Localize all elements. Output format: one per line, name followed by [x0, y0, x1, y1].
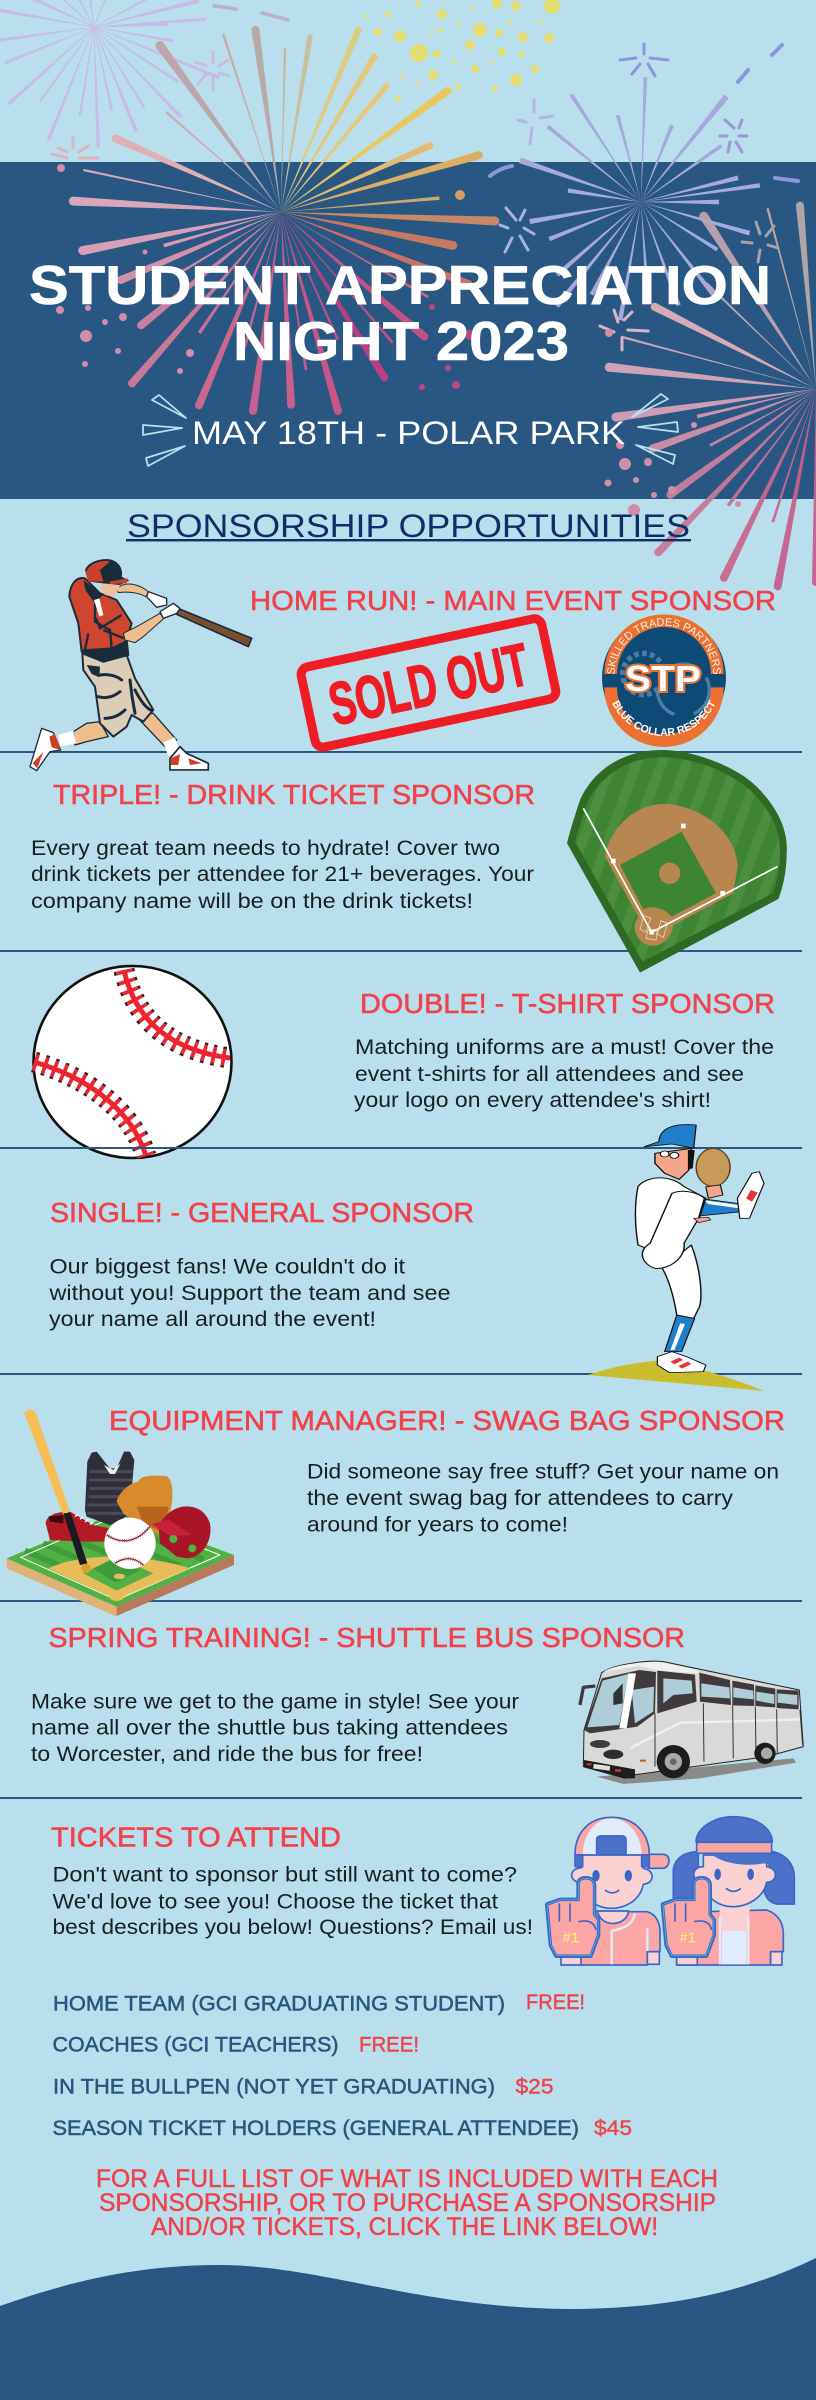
firework: top-left detached dashes	[214, 6, 288, 20]
right leg	[135, 713, 177, 747]
text: tickets description: We'd love to see you! Choose the ticket that	[52, 1890, 498, 1914]
icon: burst left of subtitle	[143, 395, 186, 466]
boy: cap	[648, 1854, 669, 1868]
gloves	[147, 592, 180, 618]
firework: yellow glitter dots	[363, 0, 560, 102]
side windows	[657, 1671, 697, 1713]
firework sparkles	[52, 44, 778, 350]
ticket: in the bullpen: $25	[516, 2076, 554, 2098]
text: equipment description: the event swag bag for attendees to carry	[307, 1486, 733, 1510]
text: single description	[48, 1254, 450, 1331]
icon: burst right of subtitle	[632, 394, 678, 464]
text: single description: your name all around the event!	[49, 1307, 376, 1331]
girl: head	[694, 1855, 775, 1907]
girl: foam finger: #1	[680, 1930, 696, 1946]
illustration: two fans with foam fingers: #1	[563, 1930, 579, 1946]
text: spring training description: Make sure we get to the game in style! See your	[31, 1690, 519, 1714]
front details	[590, 1740, 610, 1748]
header navy band	[0, 162, 816, 499]
firework: big centre burst	[69, 25, 499, 416]
body	[583, 1661, 803, 1778]
text: spring training description	[31, 1690, 519, 1766]
text: triple description	[31, 836, 534, 913]
ticket: season ticket holders: SEASON TICKET HOLDERS (GENERAL ATTENDEE)	[52, 2117, 579, 2140]
glove	[696, 1148, 730, 1186]
illustration: batter swinging	[30, 559, 252, 771]
boy: foam finger	[548, 1879, 597, 1955]
text: tickets description: best describes you below! Questions? Email us!	[52, 1915, 533, 1939]
text: equipment description	[307, 1460, 779, 1536]
torso	[635, 1178, 706, 1250]
girl: foam finger	[664, 1879, 713, 1955]
ball	[104, 1518, 156, 1569]
sold out stamp	[300, 617, 557, 749]
heading: tickets to attend: TICKETS TO ATTEND	[51, 1822, 341, 1852]
call to action text: FOR A FULL LIST OF WHAT IS INCLUDED WITH EACH	[96, 2165, 718, 2193]
illustration: two fans with foam fingers	[548, 1817, 794, 1965]
title: NIGHT 2023	[233, 310, 569, 372]
infield dirt	[605, 804, 738, 946]
foul lines and bases	[583, 808, 777, 932]
arms	[123, 613, 164, 643]
glove	[117, 1476, 172, 1537]
divider rules	[0, 751, 802, 1799]
text: triple description: Every great team needs to hydrate! Cover two	[31, 836, 500, 860]
illustration: pitcher on mound	[588, 1125, 764, 1391]
title: STUDENT APPRECIATION	[29, 254, 771, 316]
title	[29, 254, 771, 372]
text: spring training description: name all over the shuttle bus taking attendees	[31, 1716, 508, 1740]
text: spring training description: to Worcester, and ride the bus for free!	[31, 1742, 423, 1766]
logo: Skilled Trades Partners badge: BLUE COLLAR RESPECT	[612, 700, 715, 736]
call to action text: SPONSORSHIP, OR TO PURCHASE A SPONSORSHIP	[99, 2189, 716, 2217]
ticket: season ticket holders: $45	[594, 2117, 632, 2140]
section heading: sponsorship opportunities: SPONSORSHIP OPPORTUNITIES	[127, 508, 690, 544]
helmet	[158, 1506, 210, 1558]
text: single description: without you! Support the team and see	[48, 1281, 450, 1305]
ticket: coaches: COACHES (GCI TEACHERS)	[52, 2034, 338, 2056]
ticket: in the bullpen: IN THE BULLPEN (NOT YET GRADUATING)	[53, 2076, 495, 2098]
ticket: home team: FREE!	[526, 1991, 585, 2014]
panel lines	[655, 1703, 803, 1767]
mound	[588, 1361, 764, 1391]
standing leg	[665, 1315, 695, 1352]
boy: head	[572, 1855, 652, 1908]
firework: lilac burst right	[519, 77, 760, 321]
gear shapes	[623, 653, 664, 695]
shoe	[46, 1512, 110, 1542]
logo: Skilled Trades Partners badge: SKILLED TRADES PARTNERS	[607, 618, 721, 674]
bat	[24, 1410, 70, 1515]
thigh	[642, 1191, 704, 1268]
firework: top-left lilac burst	[0, 0, 220, 147]
torso	[69, 578, 132, 662]
girl: hair	[673, 1852, 698, 1905]
call to action text	[96, 2165, 718, 2241]
logo: Skilled Trades Partners badge	[602, 614, 726, 747]
wheels	[657, 1745, 690, 1778]
ticket: home team: HOME TEAM (GCI GRADUATING STUDENT)	[53, 1992, 505, 2016]
text: double description: your logo on every attendee's shirt!	[354, 1088, 711, 1112]
text: double description: Matching uniforms are a must! Cover the	[355, 1035, 774, 1059]
raised leg	[699, 1198, 742, 1216]
heading: equipment manager: EQUIPMENT MANAGER! - SWAG BAG SPONSOR	[109, 1405, 785, 1436]
head and helmet	[100, 582, 120, 597]
illustration: baseball equipment on field	[7, 1410, 234, 1617]
heading: triple: TRIPLE! - DRINK TICKET SPONSOR	[53, 779, 535, 810]
footer navy wave	[0, 2258, 816, 2400]
mirror	[580, 1686, 595, 1705]
logo: Skilled Trades Partners badge: STP	[625, 658, 701, 699]
date and venue subtitle: MAY 18TH - POLAR PARK	[192, 415, 625, 451]
firework: pink dots	[56, 164, 741, 516]
boy: body	[573, 1912, 660, 1965]
call to action text: AND/OR TICKETS, CLICK THE LINK BELOW!	[151, 2213, 658, 2241]
text: equipment description: around for years to come!	[307, 1512, 568, 1536]
head and cap	[655, 1148, 691, 1179]
text: single description: Our biggest fans! We couldn't do it	[50, 1254, 405, 1278]
shadow	[597, 1758, 796, 1784]
ticket list	[52, 1991, 632, 2140]
text: tickets description: Don't want to sponsor but still want to come?	[52, 1862, 517, 1886]
text: triple description: company name will be on the drink tickets!	[31, 889, 473, 913]
heading: double: DOUBLE! - T-SHIRT SPONSOR	[360, 988, 775, 1019]
girl: body	[677, 1910, 783, 1965]
ticket: coaches: FREE!	[359, 2034, 419, 2056]
heading: home run: HOME RUN! - MAIN EVENT SPONSOR	[250, 585, 776, 616]
sold out stamp: SOLD OUT	[323, 631, 535, 738]
windshield	[584, 1670, 656, 1733]
chest protector	[85, 1452, 134, 1525]
illustration: baseball	[34, 966, 232, 1158]
firework: lower right pink burst	[593, 191, 816, 604]
text: double description	[354, 1035, 774, 1112]
text: equipment description: Did someone say free stuff? Get your name on	[307, 1460, 779, 1484]
infield	[48, 1557, 190, 1599]
pants	[82, 653, 153, 737]
bat	[176, 608, 252, 647]
text: tickets description	[52, 1862, 533, 1939]
illustration: baseball diamond	[567, 750, 787, 973]
left leg	[73, 722, 108, 745]
text: triple description: drink tickets per attendee for 21+ beverages. Your	[31, 862, 534, 886]
heading: single: SINGLE! - GENERAL SPONSOR	[50, 1197, 474, 1228]
girl: cap and band	[696, 1817, 772, 1842]
heading: spring training: SPRING TRAINING! - SHUTTLE BUS SPONSOR	[48, 1622, 685, 1653]
text: double description: event t-shirts for all attendees and see	[355, 1062, 744, 1086]
illustration: shuttle bus	[580, 1661, 803, 1784]
firework: lilac detached dashes	[490, 45, 798, 181]
turf base	[7, 1558, 117, 1617]
divider over baseball	[0, 1147, 802, 1149]
